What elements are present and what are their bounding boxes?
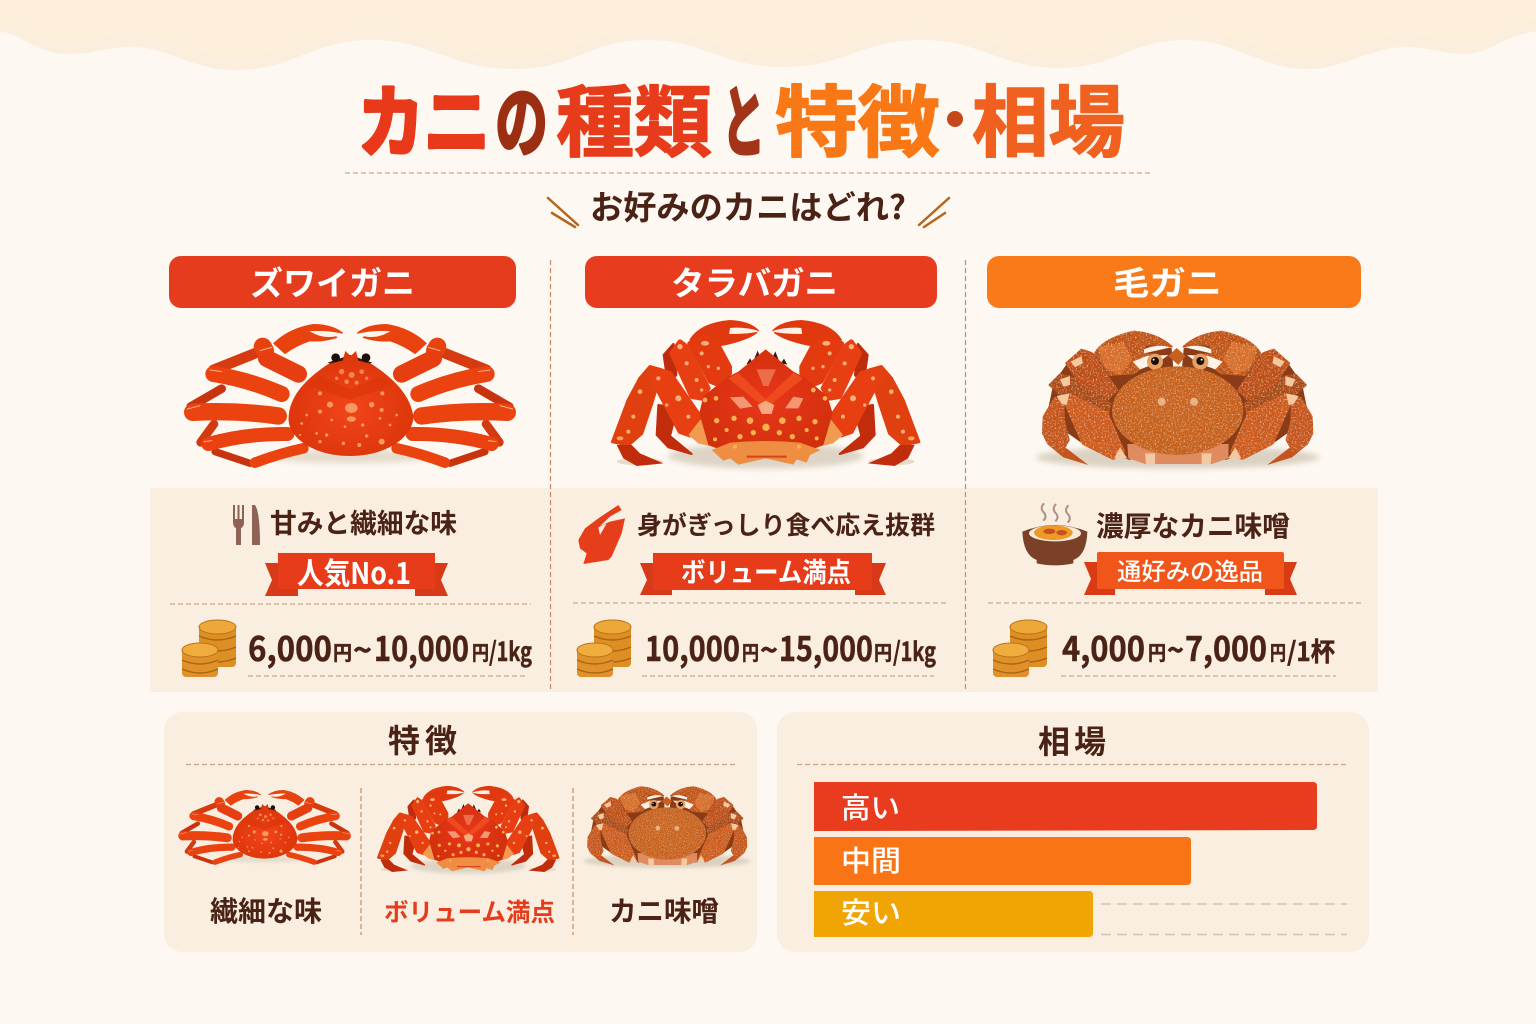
heading: 特徴: 特徴 xyxy=(388,716,457,762)
price: 円 xyxy=(1148,637,1166,666)
header: タラバガニ: タラバガニ xyxy=(671,257,838,305)
icon: coins xyxy=(182,620,236,677)
price: 10,000 xyxy=(645,622,740,671)
price: 7,000 xyxy=(1185,622,1267,671)
price: 10,000 xyxy=(374,622,469,671)
illustration: snow crab xyxy=(187,325,513,463)
price: 円 xyxy=(742,637,759,666)
ribbon: 通好みの逸品 xyxy=(1084,552,1297,595)
bar: 安い: 安い xyxy=(841,890,901,932)
ribbon: ボリューム満点: ボリューム満点 xyxy=(681,551,851,590)
feature text: 濃厚なカニ味噌 xyxy=(1096,505,1290,545)
title: と xyxy=(722,61,765,173)
feature text: 身がぎっしり食べ応え抜群 xyxy=(637,506,935,542)
price: 円 xyxy=(874,637,892,666)
bar: 高い xyxy=(814,782,1317,831)
panel: 相場 xyxy=(777,712,1369,952)
price xyxy=(248,622,532,671)
price xyxy=(645,622,936,671)
bar: 安い xyxy=(814,890,1093,937)
bar: 高い: 高い xyxy=(841,785,900,827)
ribbon: ボリューム満点 xyxy=(640,551,886,595)
panel: 特徴 xyxy=(164,712,757,952)
price: /1kg xyxy=(489,632,532,669)
item: ボリューム満点 xyxy=(378,786,559,929)
column: タラバガニ xyxy=(573,256,946,677)
price: /1杯 xyxy=(1287,632,1335,669)
price: /1kg xyxy=(893,632,936,669)
bar: 中間: 中間 xyxy=(841,838,901,880)
price: 円 xyxy=(1270,637,1286,666)
item: カニ味噌: カニ味噌 xyxy=(609,890,719,930)
title: 特徴 xyxy=(775,61,940,173)
icon: bowl of crab miso xyxy=(1022,503,1087,565)
price: ~ xyxy=(760,626,778,670)
illustration: king crab xyxy=(613,321,919,469)
heading: 相場: 相場 xyxy=(1038,717,1106,763)
price xyxy=(1062,622,1335,671)
item: 繊細な味: 繊細な味 xyxy=(210,890,322,930)
title divider xyxy=(345,172,1150,174)
header: ズワイガニ xyxy=(169,256,516,308)
ribbon: 人気No.1: 人気No.1 xyxy=(297,549,411,593)
column dividers xyxy=(550,260,966,692)
icon: fork and knife xyxy=(233,505,260,545)
header: ズワイガニ: ズワイガニ xyxy=(250,257,415,305)
price: 円 xyxy=(333,637,352,666)
item: ボリューム満点: ボリューム満点 xyxy=(384,893,555,929)
item: カニ味噌 xyxy=(584,787,751,930)
header: 毛ガニ xyxy=(987,256,1361,308)
top wave decoration xyxy=(0,0,1536,70)
icon: coins xyxy=(993,620,1047,677)
title: の xyxy=(495,61,548,173)
ribbon: 通好みの逸品: 通好みの逸品 xyxy=(1117,552,1263,587)
feature text: 甘みと繊細な味 xyxy=(270,502,457,541)
price: 円 xyxy=(472,637,489,666)
header: タラバガニ xyxy=(585,256,937,308)
illustration: horsehair crab xyxy=(1036,332,1319,469)
price: 15,000 xyxy=(779,622,873,671)
info strip background xyxy=(150,488,1378,692)
title xyxy=(358,61,1125,173)
price: 4,000 xyxy=(1062,622,1145,671)
header: 毛ガニ: 毛ガニ xyxy=(1113,257,1222,305)
icon: coins xyxy=(577,620,631,677)
title: 相場 xyxy=(972,61,1125,173)
icon: crab claw xyxy=(578,505,625,564)
ribbon: 人気No.1 xyxy=(265,549,448,596)
price: ~ xyxy=(353,626,372,670)
price: ~ xyxy=(1167,626,1184,670)
subtitle: お好みのカニはどれ? xyxy=(590,181,906,229)
price: 6,000 xyxy=(248,622,332,671)
bar: 中間 xyxy=(814,837,1191,885)
column: 毛ガニ xyxy=(987,256,1363,677)
item: 繊細な味 xyxy=(180,790,349,930)
column: ズワイガニ xyxy=(169,256,532,677)
title: 種類 xyxy=(556,61,712,173)
title: カニ xyxy=(358,61,490,173)
